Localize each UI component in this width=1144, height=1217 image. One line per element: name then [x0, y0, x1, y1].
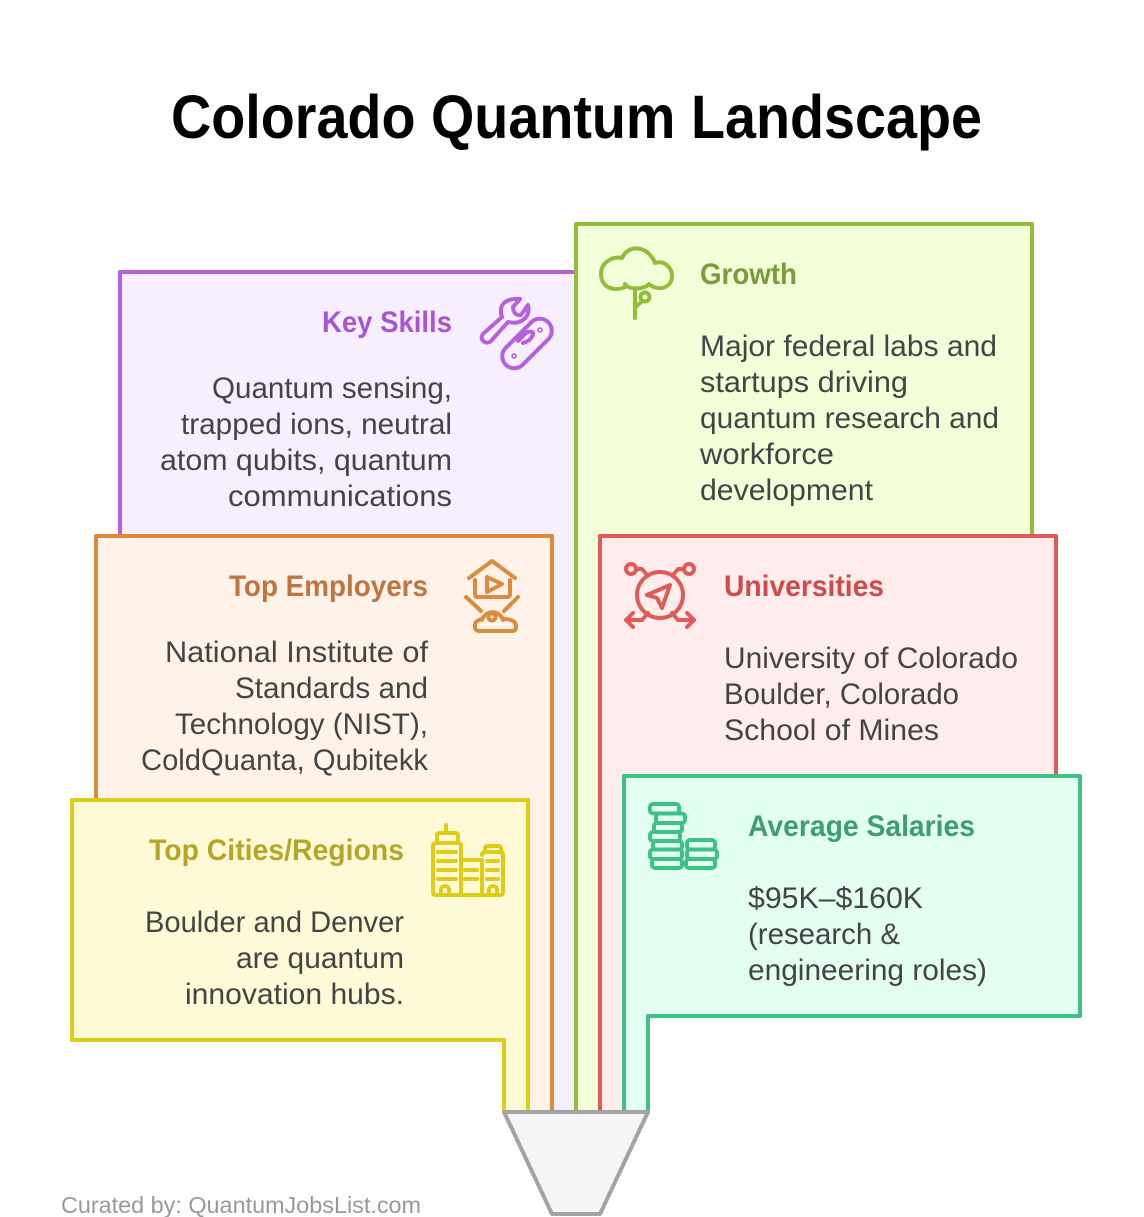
- text: universities description: Boulder, Colorado: [724, 678, 959, 711]
- text: average salaries description: engineering roles): [748, 954, 987, 987]
- panel: top employers: [96, 536, 552, 1112]
- heading: top cities: Top Cities/Regions: [149, 834, 404, 867]
- panel: growth: [576, 224, 1032, 1112]
- text: top cities description: innovation hubs.: [185, 978, 404, 1011]
- text: top cities description: Boulder and Denver: [145, 906, 404, 939]
- text: key skills description: Quantum sensing,: [212, 372, 452, 405]
- heading: universities: Universities: [724, 570, 884, 603]
- panel: universities: [600, 536, 1056, 1112]
- heading: top employers: Top Employers: [229, 570, 428, 603]
- heading: average salaries: Average Salaries: [748, 810, 975, 843]
- icon: tree: [601, 248, 672, 318]
- funnel: [504, 1112, 648, 1214]
- text: key skills description: [160, 372, 452, 513]
- text: top employers description: [141, 636, 429, 777]
- icon: stacks of coins: [650, 804, 717, 868]
- icon: compass with arrows: [626, 564, 694, 627]
- heading: growth: Growth: [700, 258, 797, 291]
- text: top employers description: ColdQuanta, Qubitekk: [141, 744, 428, 777]
- title: Colorado Quantum Landscape: [171, 83, 982, 151]
- text: key skills description: atom qubits, quantum: [160, 444, 452, 477]
- text: universities description: [724, 642, 1018, 747]
- text: growth description: startups driving: [700, 366, 908, 399]
- heading: key skills: Key Skills: [322, 306, 452, 339]
- text: top employers description: Standards and: [235, 672, 428, 705]
- text: universities description: University of Colorado: [724, 642, 1018, 675]
- text: top cities description: are quantum: [236, 942, 404, 975]
- text: growth description: quantum research and: [700, 402, 999, 435]
- icon: house and robot: [466, 561, 518, 631]
- text: growth description: Major federal labs and: [700, 330, 997, 363]
- text: universities description: School of Mines: [724, 714, 939, 747]
- text: top cities description: [145, 906, 404, 1011]
- text: top employers description: Technology (NIST),: [175, 708, 428, 741]
- text: growth description: [699, 330, 999, 507]
- text: average salaries description: [748, 882, 987, 987]
- text: key skills description: trapped ions, neutral: [181, 408, 452, 441]
- text: growth description: development: [700, 474, 873, 507]
- panel: top cities: [72, 800, 528, 1112]
- panel: key skills: [120, 272, 576, 1112]
- text: top employers description: National Institute of: [165, 636, 429, 669]
- panel: average salaries: [624, 776, 1080, 1112]
- text: key skills description: communications: [228, 480, 452, 513]
- text: average salaries description: $95K–$160K: [748, 882, 923, 915]
- icon: city buildings: [433, 825, 503, 895]
- text: growth description: workforce: [699, 438, 834, 471]
- text: average salaries description: (research &: [748, 918, 900, 951]
- icon: wrench and pocket knife: [482, 299, 557, 373]
